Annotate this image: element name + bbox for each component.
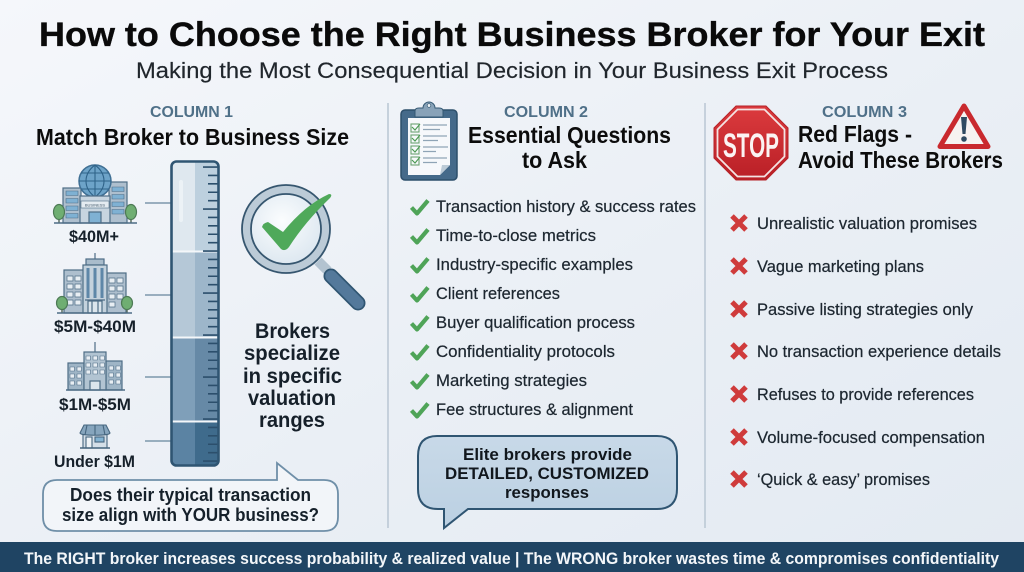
- label: $40M+: $40M+: [69, 227, 119, 246]
- checklist of questions: Industry-specific examples: [436, 256, 633, 274]
- footer banner: [0, 542, 1024, 572]
- icon: clipboard checklist: [401, 102, 457, 180]
- column 3 heading: Red Flags -: [798, 121, 912, 147]
- icon: stop sign: STOP: [723, 127, 779, 165]
- checklist of questions: Buyer qualification process: [436, 314, 635, 332]
- callout: transaction size: [43, 463, 338, 531]
- list of red flags: Refuses to provide references: [757, 386, 974, 404]
- icon: small storefront: [80, 425, 110, 448]
- icon: stop sign: [714, 106, 788, 180]
- list of red flags: Volume-focused compensation: [757, 429, 985, 447]
- divider: [388, 103, 705, 528]
- list of red flags: No transaction experience details: [757, 343, 1001, 361]
- column 2 heading: to Ask: [522, 147, 587, 173]
- icon: high-rise office building: [56, 253, 132, 313]
- list of red flags: Vague marketing plans: [757, 258, 924, 276]
- icon: mid-size office building: [66, 342, 125, 390]
- panel: column 2: [401, 102, 696, 528]
- text: brokers specialize: ranges: [259, 409, 325, 432]
- column 3 label: COLUMN 3: [822, 104, 907, 121]
- checklist of questions: Client references: [436, 285, 560, 303]
- list of red flags: ‘Quick & easy’ promises: [757, 471, 930, 489]
- text: brokers specialize: Brokers: [255, 320, 330, 343]
- label: $5M-$40M: $5M-$40M: [54, 317, 136, 336]
- panel: column 3: [714, 104, 1003, 489]
- list of red flags: [732, 215, 1001, 489]
- connector lines: [145, 203, 171, 441]
- callout: transaction size: Does their typical transaction: [70, 485, 311, 505]
- panel: column 1: [36, 104, 358, 531]
- title: How to Choose the Right Business Broker for Your Exit: [39, 16, 985, 54]
- checklist of questions: Confidentiality protocols: [436, 343, 615, 361]
- column 3 heading: [798, 121, 1003, 173]
- column 2 heading: Essential Questions: [468, 122, 671, 148]
- icon: warning triangle: [940, 106, 988, 146]
- subtitle: Making the Most Consequential Decision in Your Business Exit Process: [136, 58, 888, 83]
- checklist of questions: Transaction history & success rates: [436, 198, 696, 216]
- icon: large corporate building with globe: BUSINESS: [85, 202, 105, 208]
- column 1 heading: Match Broker to Business Size: [36, 124, 349, 150]
- checklist of questions: Marketing strategies: [436, 372, 587, 390]
- ruler scale: [172, 162, 218, 466]
- icon: magnifying glass with check mark: [242, 185, 358, 303]
- callout: elite brokers: DETAILED, CUSTOMIZED: [445, 464, 649, 483]
- text: brokers specialize: [243, 320, 342, 432]
- callout: elite brokers: Elite brokers provide: [463, 445, 632, 464]
- list of red flags: Passive listing strategies only: [757, 301, 974, 319]
- list of red flags: Unrealistic valuation promises: [757, 215, 977, 233]
- column 3 heading: Avoid These Brokers: [798, 147, 1003, 173]
- column 2 label: COLUMN 2: [504, 104, 588, 121]
- checklist of questions: Time-to-close metrics: [436, 227, 596, 245]
- checklist of questions: Fee structures & alignment: [436, 401, 633, 419]
- callout: transaction size: size align with YOUR business?: [62, 505, 319, 525]
- label: $1M-$5M: $1M-$5M: [59, 395, 131, 414]
- label: Under $1M: Under $1M: [54, 452, 135, 471]
- callout: elite brokers: responses: [505, 483, 589, 502]
- checklist of questions: [412, 198, 696, 419]
- text: brokers specialize: valuation: [248, 387, 336, 410]
- column 1 label: COLUMN 1: [150, 104, 233, 121]
- text: brokers specialize: specialize: [244, 342, 340, 365]
- text: brokers specialize: in specific: [243, 365, 342, 388]
- icon: large corporate building with globe: [54, 165, 137, 223]
- column 2 heading: [468, 122, 671, 173]
- callout: elite brokers: [418, 436, 677, 528]
